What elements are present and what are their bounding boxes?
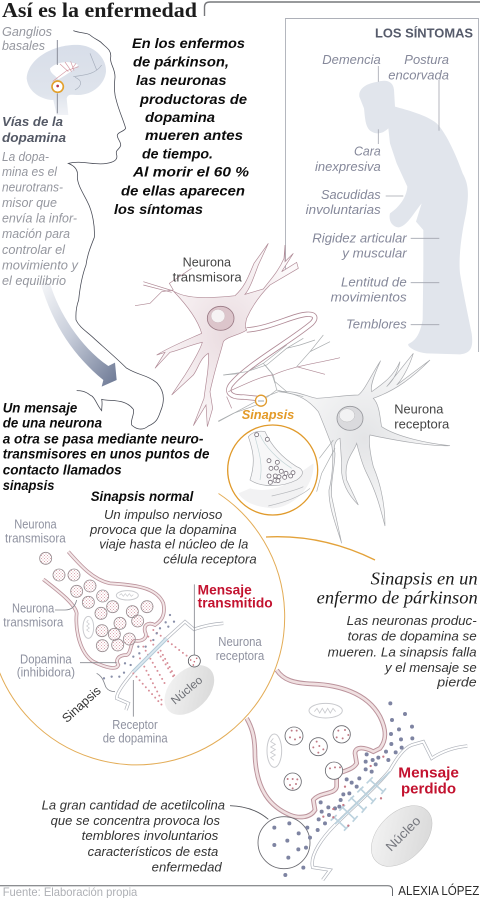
side dendrites bbox=[218, 340, 335, 492]
text: synapse explanation: sinapsis bbox=[3, 477, 55, 493]
leader line bbox=[230, 806, 268, 819]
text: intro paragraph: los síntomas bbox=[114, 201, 203, 217]
inhibitor dots bbox=[104, 615, 174, 678]
text: acetylcholine callout: La gran cantidad de acetilcolina bbox=[42, 798, 225, 812]
text: intro paragraph: dopamina bbox=[145, 109, 215, 125]
text: acetylcholine callout bbox=[42, 798, 225, 875]
text: intro paragraph: mueren antes bbox=[145, 127, 243, 143]
receptors bbox=[331, 772, 390, 831]
text: intro paragraph: las neuronas bbox=[136, 72, 227, 88]
text: acetylcholine callout: que se concentra provoca los bbox=[51, 814, 220, 828]
text: parkinson description: pierde bbox=[436, 676, 477, 690]
label: neurona receptora bbox=[394, 402, 449, 432]
label: neurona transmisora top: Neurona bbox=[14, 517, 57, 531]
heading: vías de la dopamina: dopamina bbox=[2, 130, 66, 145]
text: synapse explanation: transmisores en unos puntos de bbox=[3, 446, 210, 462]
label: ganglios basales: basales bbox=[2, 39, 45, 53]
text: dopamine description: envía la infor- bbox=[2, 212, 77, 226]
vesicles bbox=[40, 552, 153, 652]
leader lines bbox=[55, 584, 194, 717]
bottom rule bbox=[0, 886, 392, 896]
nucleus bbox=[337, 406, 363, 430]
label: neurona transmisora top bbox=[5, 517, 66, 545]
marker: synapse location bbox=[256, 395, 266, 406]
label: dopamina bbox=[17, 652, 75, 680]
label: sinapsis: Sinapsis bbox=[242, 407, 294, 422]
symptom labels bbox=[306, 53, 449, 331]
label: ganglios basales: Ganglios bbox=[2, 25, 52, 39]
text: normal description bbox=[89, 508, 257, 566]
panel frame bbox=[286, 18, 478, 352]
message marker bbox=[188, 655, 200, 667]
vesicles bbox=[284, 726, 350, 790]
panel: los síntomas bbox=[286, 18, 478, 354]
symptom labels: y muscular bbox=[341, 246, 408, 260]
symptom labels: Sacudidas bbox=[321, 188, 381, 202]
top-left dendrites bbox=[135, 268, 192, 306]
symptom labels: Temblores bbox=[346, 317, 407, 331]
top rule bbox=[204, 2, 480, 16]
transmitter membrane bbox=[43, 552, 164, 668]
text: intro paragraph bbox=[114, 35, 250, 217]
heading: sinapsis en un enfermo de párkinson bbox=[317, 568, 478, 607]
symptom labels: involuntarias bbox=[306, 203, 381, 217]
arrow: from brain to neurons bbox=[41, 283, 117, 387]
vesicles bbox=[255, 433, 295, 484]
label: receptor de dopamina: Receptor bbox=[112, 718, 158, 732]
text: synapse explanation: Un mensaje bbox=[3, 399, 77, 415]
text: parkinson description bbox=[328, 614, 477, 690]
label: mensaje perdido bbox=[398, 764, 459, 797]
label: neurona receptora bbox=[216, 635, 264, 663]
label: núcleo: Núcleo bbox=[383, 813, 424, 854]
axon bbox=[229, 314, 315, 398]
label: mensaje transmitido: Mensaje bbox=[198, 582, 252, 597]
gray crossing branches bbox=[218, 335, 330, 421]
label: neurona transmisora lower: Neurona bbox=[12, 601, 54, 615]
circle bbox=[228, 425, 318, 515]
highlight circle bbox=[52, 81, 63, 92]
text: dopamine description: misor que bbox=[2, 196, 57, 210]
text: acetylcholine callout: enfermedad bbox=[152, 861, 223, 875]
text: dopamine description: La dopa- bbox=[2, 150, 49, 164]
symptom labels: encorvada bbox=[388, 68, 449, 82]
symptom labels: inexpresiva bbox=[315, 160, 381, 174]
vesicle contents bbox=[288, 730, 348, 788]
label: ganglios basales bbox=[2, 25, 52, 53]
text: dopamine description: mación para bbox=[2, 227, 70, 241]
brain cavity bbox=[50, 62, 78, 79]
label: neurona transmisora lower bbox=[3, 601, 63, 630]
text: normal description: viaje hasta el núcleo de la bbox=[99, 537, 248, 551]
text: intro paragraph: Al morir el 60 % bbox=[132, 164, 250, 180]
neuron: receptora bbox=[218, 340, 450, 543]
label: receptor de dopamina: de dopamina bbox=[103, 731, 168, 745]
symptom labels: Lentitud de bbox=[341, 276, 407, 290]
terminal bulb bbox=[248, 431, 302, 486]
panel arc bbox=[0, 494, 285, 765]
text: intro paragraph: productoras de bbox=[139, 91, 247, 107]
text: dopamine description: mina es el bbox=[2, 165, 58, 179]
label: mensaje perdido: Mensaje bbox=[398, 764, 459, 781]
text: parkinson description: y el mensaje se bbox=[384, 661, 477, 675]
icon: brain with dopamine pathways bbox=[27, 40, 106, 115]
text: normal description: Un impulso nervioso bbox=[104, 508, 222, 522]
symptom leader lines bbox=[378, 66, 439, 325]
label: sinapsis rotated: Sinapsis bbox=[59, 684, 104, 726]
label: dopamina: (inhibidora) bbox=[17, 666, 75, 680]
nucleus bbox=[155, 656, 224, 724]
heading: sinapsis normal: Sinapsis normal bbox=[91, 489, 194, 504]
magnified synapse circle bbox=[228, 425, 318, 515]
text: normal description: célula receptora bbox=[163, 552, 257, 566]
text: dopamine description: neurotrans- bbox=[2, 180, 63, 194]
text: parkinson description: toras de dopamina se bbox=[348, 630, 477, 644]
post-synaptic shade bbox=[238, 463, 313, 508]
nucleus bbox=[207, 306, 234, 330]
receptor membrane bbox=[117, 622, 223, 710]
text: parkinson description: mueren. La sinapsis falla bbox=[328, 646, 477, 660]
acetylcholine dots bbox=[274, 703, 412, 875]
leader lines bbox=[56, 40, 59, 113]
text: dopamine description: movimiento y bbox=[2, 258, 79, 272]
text: synapse explanation bbox=[3, 399, 210, 493]
text: acetylcholine callout: característicos de esta bbox=[88, 845, 218, 859]
outgoing branches bbox=[227, 358, 340, 408]
head profile outline bbox=[68, 31, 163, 429]
text: intro paragraph: de párkinson, bbox=[133, 54, 229, 70]
orange connector arc bbox=[266, 537, 375, 560]
label: neurona transmisora: Neurona bbox=[183, 256, 231, 270]
symptom labels: Postura bbox=[404, 53, 449, 67]
transmitter membrane bbox=[247, 670, 385, 817]
acetylcholine vesicle bbox=[258, 817, 310, 869]
heading: sinapsis en un enfermo de párkinson: enfermo de párkinson bbox=[317, 587, 478, 607]
neuron body bbox=[155, 243, 298, 427]
text: intro paragraph: de ellas aparecen bbox=[121, 183, 245, 199]
dopamine path bbox=[133, 630, 190, 707]
symptom labels: Demencia bbox=[322, 53, 381, 67]
label: neurona transmisora top: transmisora bbox=[5, 531, 66, 545]
label: neurona transmisora bbox=[173, 256, 242, 285]
text: normal description: provoca que la dopamina bbox=[89, 523, 237, 537]
label: núcleo: Núcleo bbox=[169, 674, 205, 707]
panel: sinapsis normal bbox=[0, 489, 285, 765]
label: dopamina: Dopamina bbox=[20, 652, 72, 666]
text: acetylcholine callout: temblores involuntarios bbox=[82, 829, 218, 843]
heading: vías de la dopamina bbox=[2, 114, 66, 145]
heading: los síntomas: LOS SÍNTOMAS bbox=[375, 26, 473, 40]
text: synapse explanation: a otra se pasa mediante neuro- bbox=[3, 430, 204, 446]
label: mensaje perdido: perdido bbox=[401, 780, 456, 797]
text: dopamine description bbox=[2, 150, 79, 288]
brain shape bbox=[27, 45, 106, 115]
heading: vías de la dopamina: Vías de la bbox=[2, 114, 63, 129]
label: neurona receptora: receptora bbox=[216, 649, 264, 663]
label: mensaje transmitido bbox=[198, 582, 273, 611]
text: dopamine description: el equilibrio bbox=[2, 274, 66, 288]
pathway branches bbox=[53, 53, 102, 90]
neuron: transmisora bbox=[135, 243, 340, 427]
dopamine dots bbox=[323, 757, 383, 826]
label: neurona receptora: receptora bbox=[394, 418, 449, 432]
label: mensaje transmitido: transmitido bbox=[198, 596, 273, 611]
heading: sinapsis en un enfermo de párkinson: Sinapsis en un bbox=[371, 568, 478, 588]
text: synapse explanation: de una neurona bbox=[3, 415, 102, 431]
nucleus bbox=[360, 794, 444, 878]
text: dopamine description: controlar el bbox=[2, 243, 66, 257]
receptor membrane bbox=[312, 742, 467, 880]
text: parkinson description: Las neuronas produc- bbox=[347, 614, 477, 628]
text: intro paragraph: de tiempo. bbox=[142, 146, 213, 162]
silhouette: stooped person bbox=[359, 81, 472, 354]
diagram: parkinson synapse bbox=[230, 670, 467, 880]
neuron body bbox=[278, 353, 450, 543]
label: neurona receptora: Neurona bbox=[394, 402, 443, 416]
mitochondria bbox=[267, 703, 342, 767]
label: receptor de dopamina bbox=[103, 718, 168, 745]
text: intro paragraph: En los enfermos bbox=[132, 35, 245, 51]
receptors bbox=[133, 638, 167, 672]
label: neurona transmisora lower: transmisora bbox=[3, 616, 63, 630]
mitochondria bbox=[83, 591, 138, 638]
text: synapse explanation: contacto llamados bbox=[3, 461, 122, 477]
symptom labels: movimientos bbox=[331, 291, 407, 305]
label: neurona receptora: Neurona bbox=[218, 635, 262, 649]
symptom labels: Cara bbox=[354, 145, 381, 159]
symptom labels: Rigidez articular bbox=[312, 231, 408, 245]
diagram: normal synapse bbox=[40, 552, 224, 724]
label: neurona transmisora: transmisora bbox=[173, 271, 242, 285]
